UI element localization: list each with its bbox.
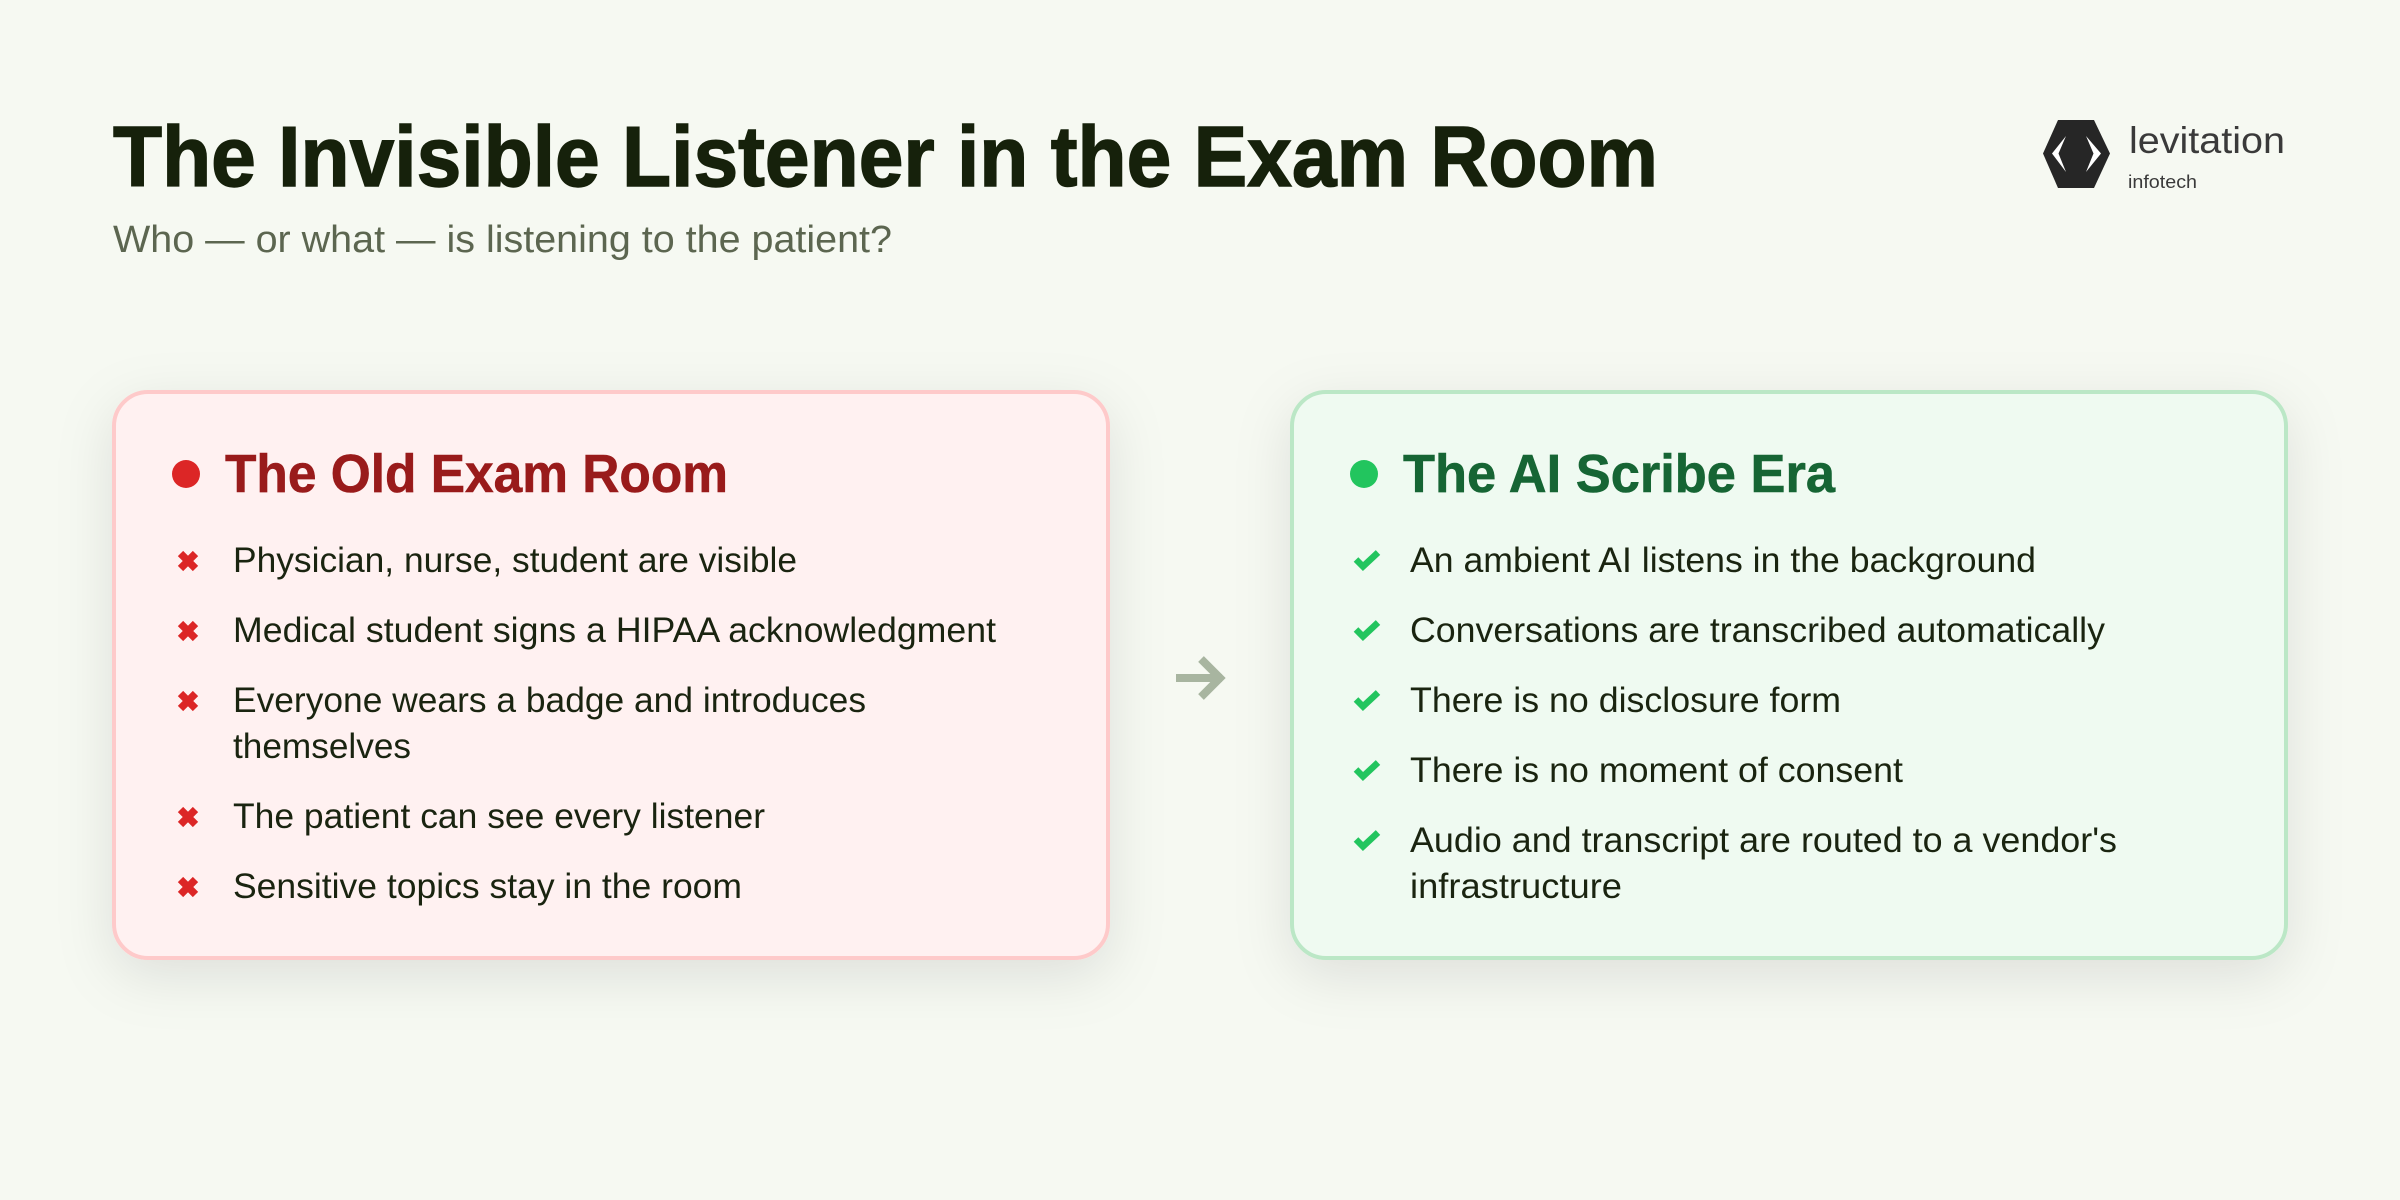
icon: check <box>1356 762 1378 776</box>
list item: Sensitive topics stay in the room <box>233 867 742 906</box>
list item: infrastructure <box>1410 867 1622 906</box>
icon: cross <box>180 810 196 824</box>
list item <box>233 681 866 766</box>
list item: themselves <box>233 727 411 766</box>
list item: Physician, nurse, student are visible <box>233 541 797 580</box>
logo tagline: infotech <box>2128 172 2197 192</box>
list item: An ambient AI listens in the background <box>1410 541 2036 580</box>
icon: check <box>1356 832 1378 846</box>
icon: cross <box>180 554 196 568</box>
icon: hexagon logo mark <box>2043 120 2110 188</box>
icon: cross <box>180 694 196 708</box>
panel: the old exam room <box>114 392 1108 958</box>
icon: check <box>1356 692 1378 706</box>
logo wordmark: levitation <box>2129 120 2285 161</box>
list item: There is no disclosure form <box>1410 681 1841 720</box>
list: ai scribe items <box>1356 541 2117 906</box>
list item: There is no moment of consent <box>1410 751 1903 790</box>
list item: Everyone wears a badge and introduces <box>233 681 866 720</box>
icon: check <box>1356 622 1378 636</box>
list item: The patient can see every listener <box>233 797 765 836</box>
panel background <box>1292 392 2286 958</box>
list item <box>1410 821 2117 906</box>
panel heading: The Old Exam Room <box>225 444 728 504</box>
panel: the ai scribe era <box>1292 392 2286 958</box>
arrow <box>1176 659 1222 697</box>
icon: cross <box>180 880 196 894</box>
logo: levitation infotech <box>2043 120 2285 192</box>
icon: cross <box>180 624 196 638</box>
panel heading: The AI Scribe Era <box>1403 444 1836 504</box>
icon: red dot <box>172 460 200 488</box>
subtitle: Who — or what — is listening to the patient? <box>113 219 892 261</box>
list item: Conversations are transcribed automatically <box>1410 611 2105 650</box>
list: old exam room items <box>180 541 996 906</box>
icon: check <box>1356 552 1378 566</box>
icon: green dot <box>1350 460 1378 488</box>
panel background <box>114 392 1108 958</box>
title: The Invisible Listener in the Exam Room <box>113 110 1658 205</box>
list item: Medical student signs a HIPAA acknowledgment <box>233 611 996 650</box>
list item: Audio and transcript are routed to a vendor's <box>1410 821 2117 860</box>
